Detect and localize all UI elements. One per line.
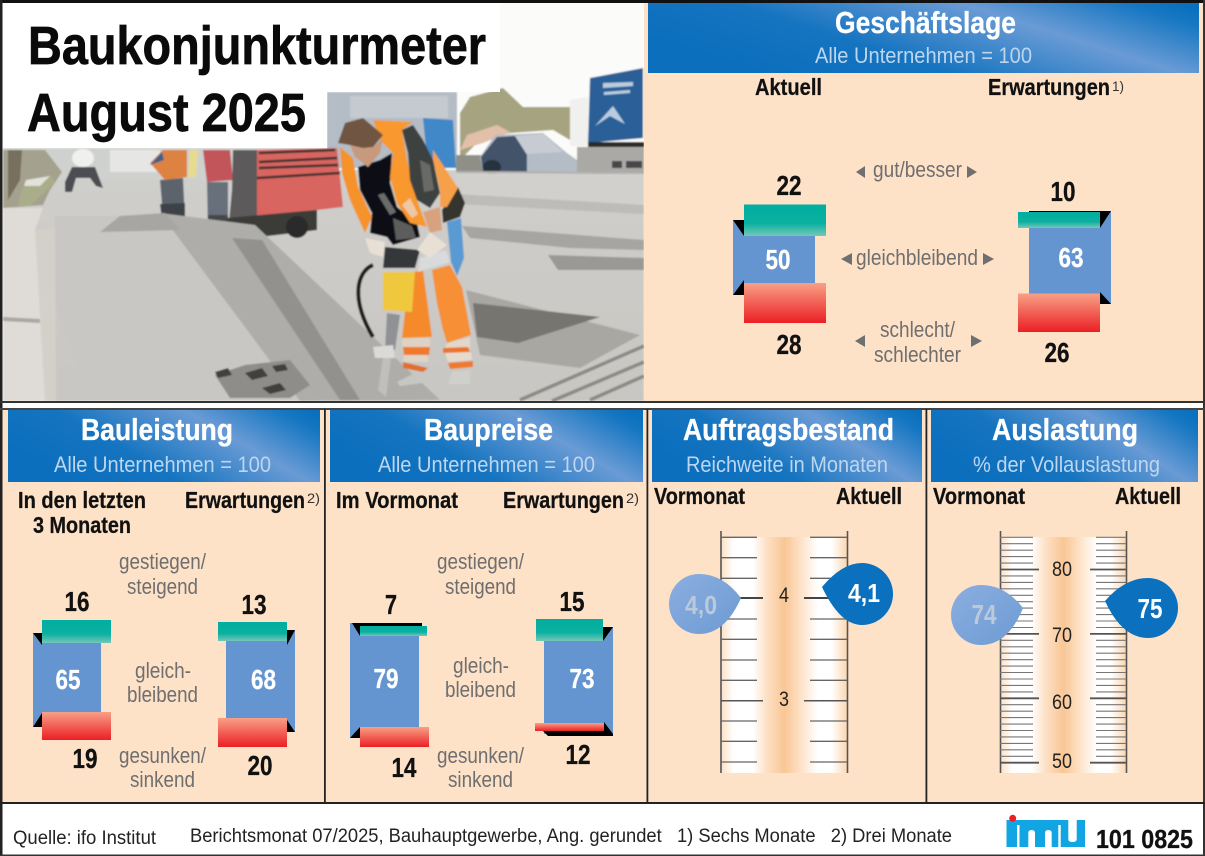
legend labels: sinkend — [130, 767, 195, 792]
column heading: Aktuell: Aktuell — [1115, 483, 1181, 509]
stacked block: Erwartungen — [535, 586, 613, 770]
title: Baukonjunkturmeter — [28, 16, 486, 76]
stacked block: Erwartungen: 20 — [248, 750, 272, 781]
marker: Aktuell 75 — [1105, 578, 1178, 638]
marker: Aktuell 4,1 — [822, 563, 893, 625]
trees — [460, 88, 570, 160]
stacked block: Erwartungen: 63 — [1058, 242, 1084, 273]
legend label: schlecht/schlechter: schlechter — [874, 342, 961, 367]
gauge scale: Auslastung: 80 — [1052, 558, 1072, 581]
legend label: gleichbleibend: gleichbleibend — [856, 245, 978, 270]
marker: Vormonat 4,0 — [669, 574, 741, 634]
road surface — [50, 216, 400, 401]
legend labels — [437, 549, 525, 792]
legend label: schlecht/schlechter: schlecht/ — [880, 317, 956, 342]
stacked block: Erwartungen: 68 — [251, 664, 276, 695]
header: Auftragsbestand — [652, 410, 922, 482]
guard rail — [456, 173, 644, 214]
arm and head — [423, 207, 442, 233]
stacked block: Erwartungen: 13 — [242, 589, 266, 620]
legend labels: sinkend — [448, 767, 513, 792]
marker: Vormonat 74 — [951, 585, 1023, 645]
logo: imu — [1006, 815, 1085, 853]
white machine — [72, 149, 94, 167]
stacked block: Vormonat: 14 — [392, 752, 417, 783]
column heading: Erwartungen: Erwartungen — [185, 487, 305, 513]
panel: Auftragsbestand — [652, 410, 922, 773]
header: Bauleistung — [8, 410, 320, 482]
stacked block: Erwartungen: 73 — [570, 663, 594, 694]
gauge scale: Auslastung: 70 — [1052, 624, 1072, 647]
gauge scale: Reichweite: 4 — [779, 584, 789, 607]
header: Bauleistung: Alle Unternehmen = 100 — [54, 452, 271, 477]
stacked block: Erwartungen — [1018, 176, 1111, 368]
barrier behind car — [456, 155, 486, 173]
stacked block: letzte 3 Monate: 65 — [56, 664, 80, 695]
panel: photo of road worker — [0, 0, 644, 401]
legend labels: gesunken/ — [119, 743, 207, 768]
legend labels: bleibend — [445, 677, 516, 702]
stacked block: Vormonat: 7 — [385, 589, 397, 620]
header: Geschäftslage: Alle Unternehmen = 100 — [815, 43, 1032, 68]
column heading: Erwartungen: 2) — [626, 490, 639, 506]
column heading: Erwartungen: Erwartungen — [503, 487, 624, 513]
title: August 2025 — [27, 83, 306, 143]
worker legs — [402, 270, 432, 338]
footer: notes: Berichtsmonat 07/2025, Bauhauptgewerbe, Ang. gerundet 1) Sechs Monate 2) Drei Monate — [190, 826, 952, 847]
legend labels: gestiegen/ — [437, 549, 525, 574]
column heading: In den letzten 3 Monaten — [18, 487, 146, 538]
gauge scale: Auslastung: 60 — [1052, 691, 1072, 714]
title — [27, 16, 486, 143]
blue lorry — [570, 97, 588, 146]
legend labels: bleibend — [127, 682, 198, 707]
gauge scale: Reichweite — [721, 531, 848, 773]
kerb — [3, 208, 55, 401]
legend labels: gleich- — [135, 658, 191, 683]
legend labels — [119, 549, 207, 792]
column heading: In den letzten 3 Monaten: In den letzten — [18, 487, 146, 513]
column heading: Vormonat: Vormonat — [933, 483, 1025, 509]
marker: Aktuell 75: 75 — [1138, 593, 1162, 624]
header: Baupreise — [330, 410, 643, 482]
stacked block: Erwartungen: 12 — [566, 739, 590, 770]
header: Geschäftslage: Geschäftslage — [835, 5, 1016, 40]
column heading: Erwartungen: Erwartungen — [988, 74, 1110, 100]
logo: imu: imu — [1008, 817, 1084, 853]
stacked block: Erwartungen: 26 — [1044, 337, 1070, 368]
panel: Baupreise — [330, 410, 643, 792]
legend labels: steigend — [445, 574, 516, 599]
header: Bauleistung: Bauleistung — [81, 412, 233, 447]
boots — [397, 372, 422, 386]
column heading: In den letzten 3 Monaten: 3 Monaten — [33, 512, 131, 538]
header: Auftragsbestand: Auftragsbestand — [683, 412, 894, 447]
gauge scale: Auslastung — [1000, 531, 1127, 773]
torso — [442, 187, 465, 223]
footer: product number: 101 0825 — [1096, 824, 1193, 854]
stacked block: Aktuell — [733, 170, 826, 360]
gauge scale: Reichweite: 3 — [779, 688, 789, 711]
stacked block: Erwartungen: 10 — [1050, 176, 1076, 207]
panel: lower peach background — [0, 409, 1205, 802]
column heading: Vormonat: Vormonat — [654, 483, 745, 509]
stacked block: Aktuell: 22 — [776, 170, 802, 201]
legend labels: gesunken/ — [437, 743, 525, 768]
stacked block: Aktuell: 50 — [766, 244, 790, 275]
column heading: Erwartungen: 1) — [1112, 78, 1124, 94]
right road streaks — [462, 226, 644, 250]
header: Baupreise: Alle Unternehmen = 100 — [378, 452, 595, 477]
footer: source: Quelle: ifo Institut — [13, 828, 157, 849]
white title block — [0, 0, 500, 148]
legend labels: gleich- — [453, 653, 509, 678]
legend label: schlecht/schlechter — [855, 317, 982, 367]
distant truck — [327, 92, 457, 168]
blue glove side — [447, 218, 464, 276]
legend labels: gestiegen/ — [119, 549, 207, 574]
kerb lines lower right — [520, 346, 644, 401]
panel: Bauleistung — [8, 410, 320, 792]
column heading: Aktuell: Aktuell — [836, 483, 902, 509]
legend labels: steigend — [127, 574, 198, 599]
marker: Vormonat 74: 74 — [972, 599, 997, 630]
panel: Auslastung — [931, 410, 1198, 773]
stacked block: letzte 3 Monate: 16 — [64, 586, 90, 617]
red machine — [228, 150, 257, 233]
stacked block: Erwartungen: 15 — [560, 586, 584, 617]
column heading: Erwartungen: 2) — [307, 490, 320, 506]
stacked block: letzte 3 Monate — [33, 586, 111, 774]
header: Auftragsbestand: Reichweite in Monaten — [686, 452, 888, 477]
jackhammer — [383, 247, 420, 268]
vegetation left — [3, 150, 62, 208]
header: Auslastung: Auslastung — [992, 412, 1138, 447]
panel: Geschäftslage — [644, 3, 1203, 401]
header: Geschäftslage — [648, 3, 1199, 73]
gloves — [365, 238, 385, 257]
debris — [215, 360, 310, 398]
car — [480, 133, 577, 173]
marker: Aktuell 4,1: 4,1 — [848, 578, 880, 608]
stacked block: Aktuell: 28 — [776, 329, 802, 360]
stacked block: Erwartungen — [218, 589, 295, 781]
legend label: gut/besser: gut/besser — [873, 157, 962, 182]
pothole — [466, 290, 640, 368]
background workers — [160, 178, 185, 228]
header: Baupreise: Baupreise — [424, 412, 553, 447]
stacked block: letzte 3 Monate: 19 — [72, 743, 98, 774]
column heading: Aktuell: Aktuell — [755, 74, 822, 100]
marker: Vormonat 4,0: 4,0 — [685, 590, 717, 620]
column heading: Im Vormonat: Im Vormonat — [336, 487, 458, 513]
header: Auslastung — [931, 410, 1198, 482]
stacked block: Vormonat: 79 — [374, 663, 398, 694]
stacked block: Vormonat — [350, 589, 429, 783]
gauge scale: Auslastung: 50 — [1052, 750, 1072, 773]
header: Auslastung: % der Vollauslastung — [973, 452, 1160, 477]
